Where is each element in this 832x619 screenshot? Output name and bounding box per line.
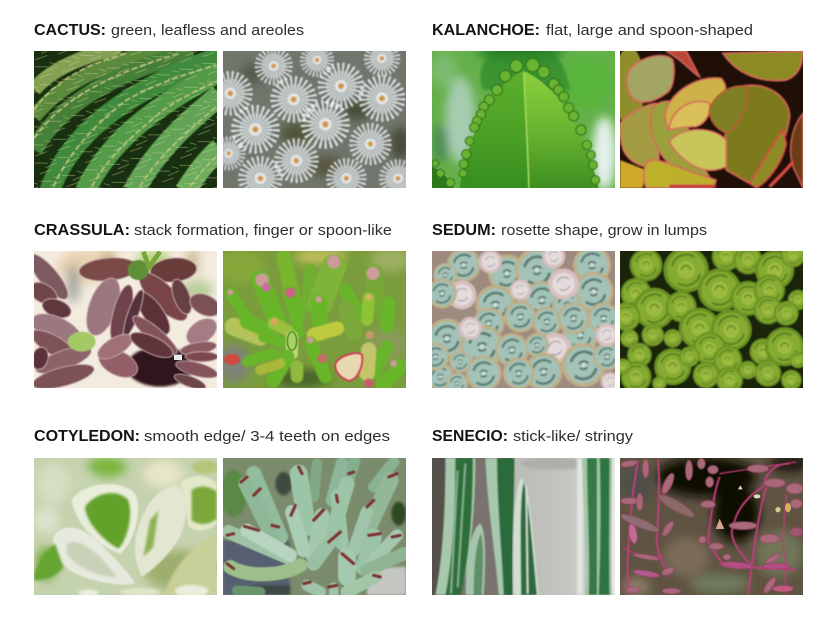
heading: cotyledon bbox=[34, 428, 390, 445]
photo: senecio pink string of pods bbox=[620, 458, 803, 595]
photo: pale blue sedum rosettes bbox=[432, 251, 615, 388]
photo: teal cotyledon with red tips bbox=[223, 458, 406, 595]
photo: kalanchoe leaf with beaded edge bbox=[432, 51, 615, 188]
heading: sedum: rosette shape, grow in lumps bbox=[501, 222, 707, 239]
heading: cactus: green, leafless and areoles bbox=[111, 22, 304, 39]
heading: sedum bbox=[432, 222, 707, 239]
heading: kalanchoe: KALANCHOE: bbox=[432, 22, 540, 39]
heading: crassula bbox=[34, 222, 392, 239]
heading: cotyledon: COTYLEDON: bbox=[34, 428, 140, 445]
heading: sedum: SEDUM: bbox=[432, 222, 496, 239]
heading: kalanchoe bbox=[432, 22, 753, 39]
heading: crassula: stack formation, finger or spoon-like bbox=[134, 222, 392, 239]
heading: senecio: stick-like/ stringy bbox=[513, 428, 634, 445]
photo: paddle plant kalanchoe bbox=[620, 51, 803, 188]
photo: senecio green sticks bbox=[432, 458, 615, 595]
photo: white-spined cactus areoles bbox=[223, 51, 406, 188]
photo: purple crassula rosettes bbox=[34, 251, 217, 388]
photo: fuzzy white-edged cotyledon bbox=[34, 458, 217, 595]
heading: kalanchoe: flat, large and spoon-shaped bbox=[546, 22, 753, 39]
photo: golden barrel cactus ribs bbox=[34, 51, 217, 188]
heading: cactus: CACTUS: bbox=[34, 22, 106, 39]
heading: cactus bbox=[34, 22, 304, 39]
heading: senecio bbox=[432, 428, 634, 445]
heading: senecio: SENECIO: bbox=[432, 428, 508, 445]
heading: cotyledon: smooth edge/ 3-4 teeth on edges bbox=[144, 428, 390, 445]
heading: crassula: CRASSULA: bbox=[34, 222, 130, 239]
photo: green jade finger crassula bbox=[223, 251, 406, 388]
photo: bright green sedum rosettes bbox=[620, 251, 803, 388]
